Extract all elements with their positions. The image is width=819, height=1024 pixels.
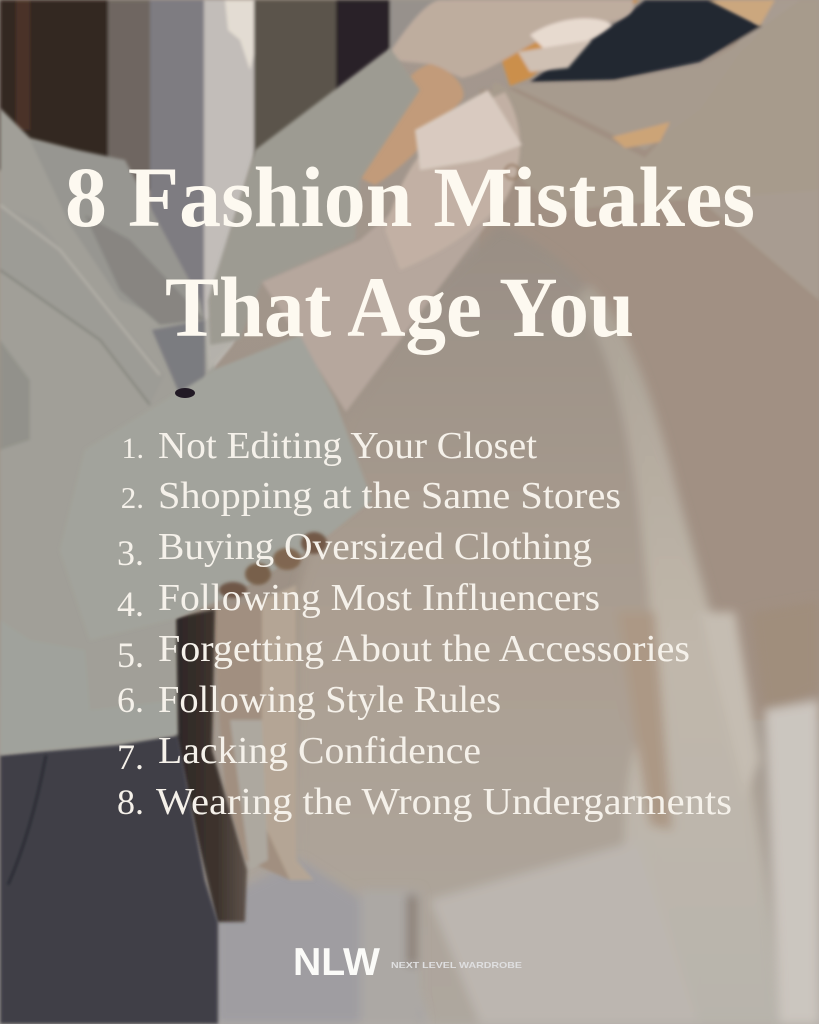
floor and pale backdrop — [215, 860, 425, 1024]
item 2: Shopping at the Same Stores — [158, 475, 621, 517]
item 7: Lacking Confidence — [158, 730, 481, 772]
item 2: 2. — [121, 480, 144, 515]
hand — [385, 90, 522, 270]
scarf lower end — [152, 300, 240, 395]
title: 8 Fashion Mistakes — [65, 149, 755, 245]
item 5: 5. — [117, 635, 144, 675]
item 8: 8. — [117, 782, 144, 822]
sand sweater on hanger — [470, 0, 819, 720]
brand logo: NEXT LEVEL WARDROBE — [391, 960, 522, 970]
item 3: Buying Oversized Clothing — [158, 526, 592, 568]
sleeve cuff buttons — [219, 532, 327, 598]
grey jacket body — [0, 108, 370, 755]
item 1: Not Editing Your Closet — [158, 425, 537, 467]
brown skirt panels — [212, 585, 314, 880]
jacket button — [175, 388, 195, 398]
dark panel behind jacket — [174, 609, 247, 922]
brand logo — [293, 941, 522, 984]
item 6: 6. — [117, 680, 144, 720]
item 7: 7. — [117, 737, 144, 777]
numbered list of mistakes — [117, 425, 732, 823]
item 4: Following Most Influencers — [158, 577, 600, 619]
brand logo: NLW — [293, 941, 380, 984]
title: That Age You — [165, 259, 634, 355]
hanger and arm skin — [360, 0, 775, 185]
title — [65, 149, 755, 355]
item 4: 4. — [117, 584, 144, 624]
item 5: Forgetting About the Accessories — [158, 628, 690, 670]
item 1: 1. — [122, 432, 144, 465]
dark trousers — [0, 735, 218, 1024]
item 3: 3. — [117, 533, 144, 573]
item 8: Wearing the Wrong Undergarments — [156, 781, 732, 823]
clothes on the rail — [0, 0, 450, 400]
jacket sleeve and forearm — [60, 48, 505, 640]
cream sleeve and lower knit — [296, 225, 819, 1024]
item 6: Following Style Rules — [158, 679, 501, 721]
